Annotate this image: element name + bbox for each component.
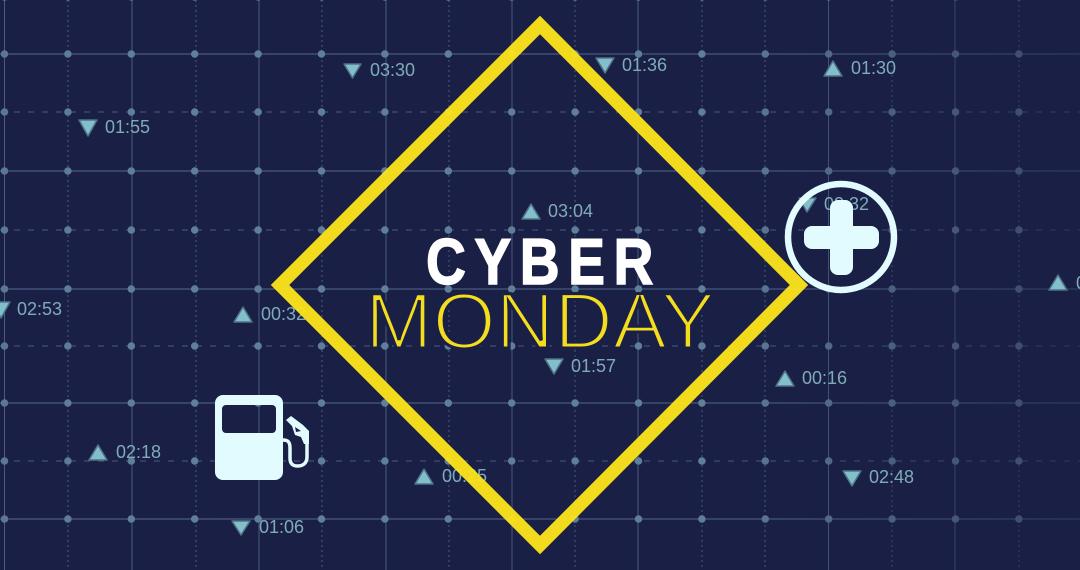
marker 02:53: 02:53 xyxy=(17,299,62,319)
marker 01:06 xyxy=(232,517,304,537)
marker 00:32: 00:32 xyxy=(261,304,306,324)
marker 03:32 behind plus icon: 03:32 xyxy=(824,194,869,214)
title: MONDAY: MONDAY xyxy=(365,276,715,365)
marker 00:32 xyxy=(234,304,306,324)
marker 00:16: 00:16 xyxy=(802,368,847,388)
marker 01:30 xyxy=(824,58,896,78)
title: CYBER: CYBER xyxy=(426,225,662,298)
marker 01:57 xyxy=(545,356,616,376)
marker 01:06: 01:06 xyxy=(259,517,304,537)
marker 01:57: 01:57 xyxy=(571,356,616,376)
marker 01:30: 01:30 xyxy=(851,58,896,78)
marker 01:36 xyxy=(596,55,667,75)
icon: fuel pump xyxy=(215,395,309,480)
marker 01:55: 01:55 xyxy=(105,117,150,137)
marker 00:16 xyxy=(776,368,847,388)
marker 02:18 xyxy=(89,442,161,462)
marker 03:30: 03:30 xyxy=(370,60,415,80)
marker 02:48: 02:48 xyxy=(869,467,914,487)
marker 03:30 xyxy=(344,60,415,80)
marker 02:18: 02:18 xyxy=(116,442,161,462)
marker 03:04: 03:04 xyxy=(548,201,593,221)
icon: plus in circle xyxy=(788,184,894,290)
marker 03:32 behind plus icon xyxy=(799,194,869,214)
marker 03:04 xyxy=(522,201,593,221)
marker 00:25 xyxy=(415,466,487,486)
marker 01:55 xyxy=(79,117,150,137)
marker 00:25: 00:25 xyxy=(442,466,487,486)
marker 02:48 xyxy=(843,467,914,487)
yellow diamond frame xyxy=(280,25,799,545)
marker at right edge xyxy=(1049,273,1080,293)
marker 01:36: 01:36 xyxy=(622,55,667,75)
